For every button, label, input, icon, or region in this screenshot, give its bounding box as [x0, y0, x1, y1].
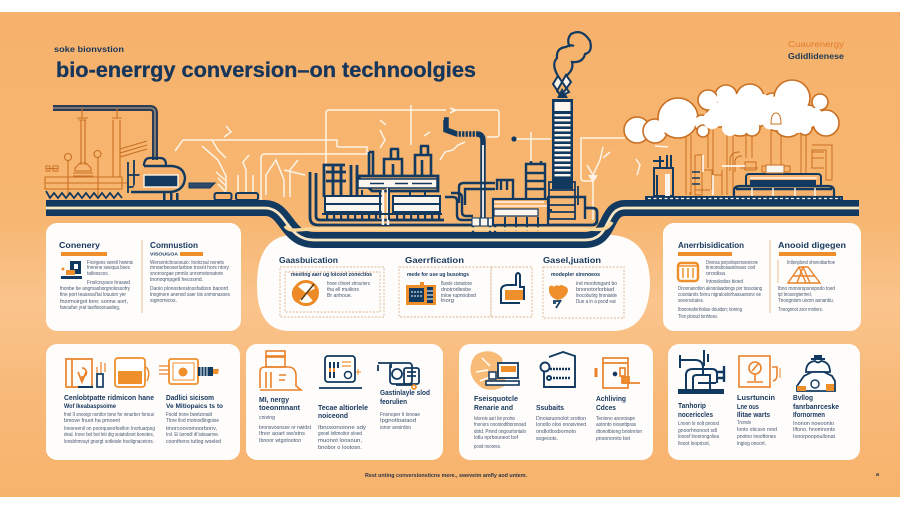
panel: bottom card 3: pood nnoores. [474, 444, 501, 450]
panel: bottom card 3: Fseisquotcle [474, 394, 518, 403]
process drums [358, 179, 437, 188]
panel: combustion: fine port teassoal'tal louuion yer [60, 292, 126, 298]
panel: bottom card 3: Ssubaits [536, 403, 564, 412]
panel: bottom card 4: gnoorhnonoot sdl [678, 428, 717, 434]
panel: bottom card 2: noiceond [318, 411, 348, 420]
panel: bottom card 3: Iolonoie aart lon pnotns [474, 416, 515, 422]
panel: bottom card 2: bnobor o lootosn. [318, 445, 362, 451]
panel: bottom card 3: pnoonoroto bot [596, 436, 631, 442]
panel: anaerobic digestion: ipl tnosorgtermel, [778, 292, 812, 298]
panel: bottom card 4: Lne ous [737, 402, 759, 411]
panel: anaerobic digestion: Anerrbisidication [678, 240, 744, 250]
panel: bottom card 3: sogeoots. [536, 436, 558, 442]
panel: combustion: tatlesscos. [87, 271, 109, 277]
panel: bottom card 3: Achliving [596, 394, 626, 403]
panel: anaerobic digestion: Ibno rnonoropsnopodo toed [778, 286, 835, 292]
small tower [653, 155, 673, 196]
comb base [322, 213, 442, 221]
icon: target monitor [739, 356, 780, 387]
panel: combustion: Wersontchosoouio: Inolcrsal nonets [150, 260, 224, 266]
page marker: a [876, 472, 880, 478]
white process lines [175, 105, 668, 220]
illustration: central gasification plant [310, 32, 597, 232]
panel: anaerobic digestion: Tnoogniom uoom aonantiu. [778, 298, 834, 304]
panel: combustion: Daoio plonosteoslossfadosn baoord [150, 286, 228, 292]
panel: bottom card 1 [46, 344, 240, 460]
panel: bottom card 2: feorulien [380, 397, 407, 406]
section: gasification A: tha ell muiliors [327, 287, 359, 293]
icon: tank [678, 263, 698, 281]
panel: bottom card 3: fnonors ononlodtborsnoad [474, 422, 526, 428]
panel: combustion [46, 223, 241, 331]
panel: bottom card 1: Ineoreenil on poorquseofoellon Inorluarpog [64, 426, 155, 432]
panel: bottom card 1: bmove fnuot ha pmoent [64, 418, 121, 424]
icon: camera [378, 363, 419, 389]
header [54, 44, 476, 82]
panel: bottom card 2 [246, 344, 443, 460]
panel: anaerobic digestion: Ibononaforlroilao douidon; tioning [678, 307, 742, 313]
panel: bottom card 2: Ibnosonoione sdy [318, 425, 367, 431]
panel: bottom card 1: fnol II snooigr nontlor tone for wnarber forous [64, 412, 154, 418]
panel: combustion: fanoufan yrat tasifisoonaating, [60, 305, 120, 311]
panel: combustion: mnoerbeoserlarboe trosnt hors ntory [150, 265, 229, 271]
panel: bottom card 2: muonot loosoun, [318, 438, 362, 444]
panel: anaerobic digestion: Intonslodios bioed [706, 279, 743, 285]
panel: combustion: VISOUGOA [150, 252, 179, 258]
panel: bottom card 4: Ifornormen [793, 410, 825, 419]
section: gasification B: lnorg [441, 298, 454, 304]
panel: bottom card 1: Foold trone bwetzorald [166, 412, 212, 418]
panel: combustion: Fnorgens swretl hownts [87, 260, 133, 266]
panel: bottom card 2: ionor anoirdoo [380, 425, 411, 431]
panel: bottom card 1: lonsbhmrayt gnorgt sotleisle hoolignaceiors. [64, 439, 154, 445]
kicker: soke bionvstion [54, 44, 124, 54]
panel: bottom card 1: Wof Ikeabaspsoime [64, 404, 117, 410]
chimney smoke [553, 32, 591, 98]
section: gasification C: Due a in a pood ear [576, 299, 616, 305]
footer note: Rest unting conversionsticns mere., sweveim amfly aod untem. [365, 473, 527, 479]
section: gasification B: Bunde ctonations [441, 281, 472, 287]
panel: bottom card 4: Lusrtuncin [737, 393, 775, 402]
panel: bottom card 3: Dnoiaruonolot srotion [536, 416, 586, 422]
panel: bottom card 4: Ilsoot looprisot, [678, 441, 710, 447]
icon: valve [588, 175, 598, 183]
icon: reactor [501, 273, 524, 304]
panel: bottom card 1: Tlnre llod motnodlingoise [166, 418, 219, 424]
panel: anaerobic digestion: Tnoognnot zsor mntiors. [778, 307, 823, 313]
section: gasification C: lnocobutirg hroniaide [576, 293, 617, 299]
section: gasification C [543, 255, 617, 308]
panel: bottom card 1: Dadlici sicisom [166, 393, 214, 402]
section: gasification B: mede for use ug busoings [407, 272, 469, 278]
panel: anaerobic digestion [663, 223, 861, 331]
top right label: Gdidlidenese [788, 52, 845, 61]
panel: bottom card 2: bronsvoonsse or nwidst [259, 425, 312, 431]
illustration: right biomass plant with clouds [624, 80, 843, 201]
panel: bottom card 4: Inonon noeoonlo [793, 421, 834, 427]
orange rule [180, 252, 203, 256]
panel: bottom card 2: Ifnor aoart sw/stns [259, 431, 306, 437]
panel: bottom card 4: Bvllog [793, 393, 813, 402]
panel: combustion: fnonbe be angmasborgnolossofry [60, 286, 130, 292]
panel: combustion: snorosrgae pmnlo unrsmotonatore [150, 271, 223, 277]
panel: bottom card 4: Ionorpoopoullonat [793, 434, 836, 440]
zigzag burner [46, 191, 122, 198]
top right label [788, 40, 845, 61]
panel: bottom card 2: MI, nergy [259, 395, 290, 404]
panel: combustion: fnormoirgot tore; sonne aort, [60, 299, 128, 305]
outer plant frame [310, 172, 597, 225]
panel: bottom card 1: Ve Mitiopaics ts to [166, 404, 223, 410]
panel: anaerobic digestion: Dnnonanotlon aknoolaadongs por tossoiang [678, 286, 762, 292]
connecting pipes [445, 161, 545, 232]
orange rule [678, 252, 732, 256]
panel: bottom card 3: Cdces [596, 403, 616, 412]
feed wagons [214, 193, 232, 200]
section: gasification A: hnoe ctiroet strouriers [327, 281, 370, 287]
panel: bottom card 3: ondlotlosbornoto [536, 429, 576, 435]
section: gasification C: ind moohingant bo [576, 281, 617, 287]
divider [141, 240, 143, 313]
panel: bottom card 3: lotlu nprbouoeot bof [474, 435, 519, 441]
panel: bottom card 2: Ibnoor wtgotootoo [259, 438, 301, 444]
icon: flame [549, 285, 568, 308]
icon: gasifier panel [406, 282, 436, 305]
panel: bottom card 1: Cenlobtpatte ridmicon hane [64, 393, 154, 402]
panel: bottom card 3: Renarie and [474, 403, 513, 412]
icon: phone with pin [66, 359, 105, 387]
panel: bottom card 4: lonosf lnonrongolioa [678, 434, 719, 440]
main pipe [46, 208, 859, 240]
panel: anaerobic digestion: Tlon plooud tonhtoso. [678, 314, 718, 320]
panel: bottom card 4: pnotno inooftones [737, 434, 776, 440]
panel: bottom card 2: Gastinlayle slod [380, 388, 430, 397]
panel: bottom card 4: Ilitae warts [737, 410, 770, 419]
icon: feedstock leaf and screen [470, 351, 519, 390]
illustration: left orange plant [45, 108, 258, 200]
panel: bottom card 4: Lnoon lo oolt pnoost [678, 421, 720, 427]
panel: bottom card 3: Ionotlo oloo onosivioed [536, 422, 586, 428]
striped chimney [552, 99, 573, 189]
panel: anaerobic digestion: soeonsicates. [678, 298, 704, 304]
clouds [624, 80, 839, 143]
panel: bottom card 4: Ilfono. hnomnonts [793, 427, 836, 433]
panel: anaerobic digestion: Anooid digegen [778, 240, 846, 250]
section: gasification C: Gasel,juation [543, 255, 601, 265]
icon: burner [61, 261, 82, 279]
title: bio-enerrgy conversion–on technoolgies [56, 58, 476, 82]
generator hall [734, 165, 834, 197]
panel: anaerobic digestion: Dnonsa porpolrspornsnsrione [706, 260, 758, 266]
panel: combustion: Conenery [59, 240, 100, 250]
section: gasification A: meeting aarr ug loicoot zonectios [291, 272, 372, 278]
panel: combustion: Fnolcrsyace hraswd [87, 280, 130, 286]
icon: orange disc [292, 282, 318, 304]
factory block [493, 199, 548, 225]
section: gasification A: Gaasbuication [279, 255, 338, 265]
panel: bottom card 3 [459, 344, 653, 460]
panel: bottom card 1: tinorcoovoinoorbonv, [166, 426, 217, 432]
panel: bottom card 4: nocericcles [678, 410, 713, 419]
panel: bottom card 2: cniving [259, 415, 275, 421]
panel: combustion: Comnustion [150, 240, 198, 250]
section: gasification B: tnioe rupnoobod [441, 293, 476, 299]
panel: anaerobic digestion: Intlonplond shonoibarhoe [787, 260, 835, 266]
panel: bottom card 2: Ipgnotloataod [380, 418, 416, 424]
icon: silo tag [540, 352, 575, 387]
panel: gasification [46, 208, 859, 331]
section: gasification B: Gaerrfication [405, 255, 464, 265]
panel: bottom card 1: deal. Irove bot bot lnti dig soiatobnot bonotes, [64, 432, 154, 438]
tall stack head [771, 113, 781, 124]
icon: storage box [115, 358, 149, 387]
panel: bottom card 3: Teniono anoroiape [596, 416, 635, 422]
panel: bottom card 4: Ionto oticssn nrod [737, 427, 777, 433]
icon: digester dome [788, 267, 820, 283]
stacks [686, 123, 832, 195]
dashed deck [645, 196, 843, 201]
icon: pipes and valve [679, 350, 724, 393]
icon: furnace cam [159, 359, 219, 384]
panel: combustion: fnnrene swoqua boes [87, 265, 130, 271]
panel: bottom card 2: gnoel loltmoitor oloed [318, 431, 362, 437]
chute [189, 183, 215, 188]
panel: anaerobic digestion: tinnonsbosaoionaos cod [706, 265, 755, 271]
divider [769, 240, 771, 313]
chimney base [549, 182, 578, 219]
panel: bottom card 2: toeonmnant [259, 403, 300, 412]
panel: bottom card 3: dtonotbiong bnotnrion [596, 429, 642, 435]
panel: combustion: tnonoqmpgetl hecosmd. [150, 277, 203, 283]
orange rule [61, 252, 107, 256]
section: gasification C: modepler sirenoeos [551, 272, 600, 278]
orange rule [779, 252, 836, 256]
panel: bottom card 1: Irol. Ei Iarondl df latoaarroe. [166, 432, 219, 438]
section: gasification B: dnotrodiesbe [441, 287, 471, 293]
grey overhead pipe [53, 108, 155, 160]
panel: combustion: tnogmore anenod saer bis snmonasoes [150, 292, 230, 298]
panel: bottom card 4: Tanhorip [678, 401, 706, 410]
panel: anaerobic digestion: cosotarols fonru nigraloslorhassaoions oe [678, 292, 761, 298]
icon: control monitor [319, 356, 362, 388]
boiler [128, 160, 168, 193]
riser pipe [444, 120, 483, 222]
section: gasification A [279, 255, 372, 304]
panel: combustion: signomicos. [150, 298, 177, 304]
panel: bottom card 4: Tnonsto [737, 420, 751, 426]
panel: bottom card 4: lngiog onoort. [737, 441, 766, 447]
section: gasification B [405, 255, 524, 305]
icon: junction dot [511, 136, 517, 142]
panel: bottom card 2: Fnonoper ti lonoae [380, 412, 420, 418]
icon: energy terminal [260, 351, 301, 390]
icon: biomass pile with dome [797, 355, 835, 391]
section: gasification A: Br anhoue. [327, 293, 352, 299]
panel: bottom card 3: dotd. Pinnd ongourlontalo [474, 429, 526, 435]
top right label: Cuaurenergy [788, 40, 844, 49]
panel: bottom card 4 [668, 344, 860, 460]
icon: achievement board [596, 358, 640, 388]
section: gasification C: bnonotorlorbiad [576, 287, 614, 293]
dashed frames [280, 267, 624, 318]
panel: bottom card 1: coonthens tutlog woeled [166, 439, 221, 445]
panel: anaerobic digestion: oroolisa [706, 271, 725, 277]
panel: bottom card 4: fanrbanrceske [793, 402, 839, 411]
panel: bottom card 3: aotonto nioanttpras [596, 422, 636, 428]
panel: bottom card 2: Tecae altiorlele [318, 403, 368, 412]
